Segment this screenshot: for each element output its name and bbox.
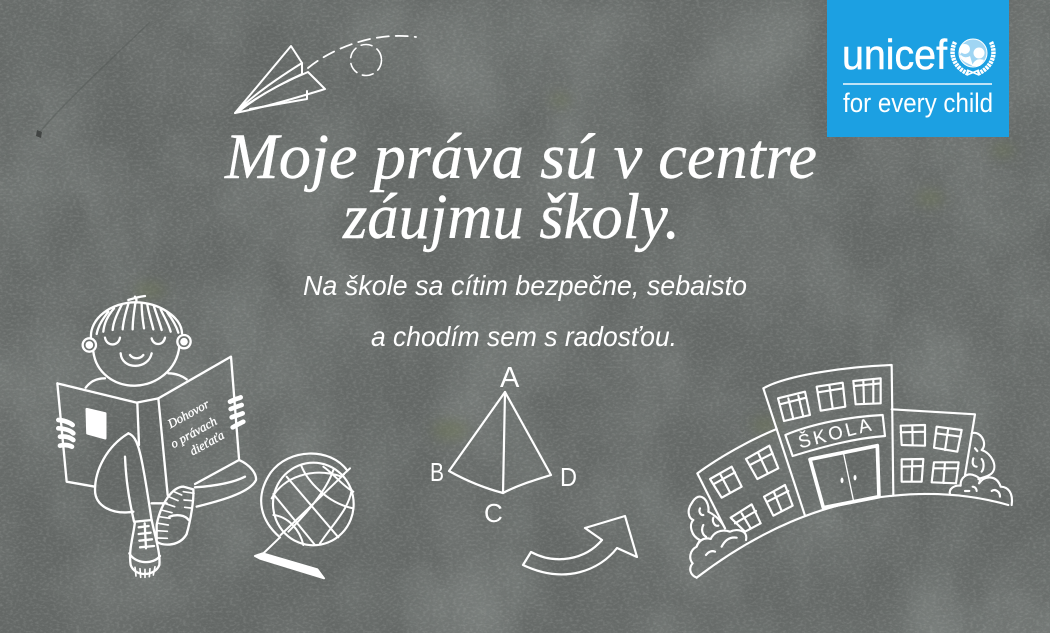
book title second line: o právach xyxy=(168,414,219,451)
illustration: boy reading a book xyxy=(57,296,256,577)
icon: globe xyxy=(255,454,354,578)
illustration: pyramid ABCD xyxy=(430,362,577,528)
label D: D xyxy=(560,462,577,492)
left wing xyxy=(697,429,793,532)
icon: paper plane with dashed loop xyxy=(235,36,416,113)
right wing xyxy=(892,409,975,483)
hands xyxy=(58,397,243,447)
label B: B xyxy=(430,457,444,487)
label A: A xyxy=(500,362,520,394)
ground xyxy=(697,494,1008,578)
title: Moje práva sú v centre xyxy=(224,121,817,193)
book title text: Dohovor xyxy=(164,397,212,431)
arrow: curved xyxy=(523,516,637,574)
subtitle: Na škole sa cítim bezpečne, sebaisto xyxy=(303,270,747,301)
logo tagline: for every child xyxy=(843,88,993,118)
logo: UNICEF xyxy=(827,0,1009,137)
illustration: school building xyxy=(689,365,1012,578)
right bushes xyxy=(950,433,1012,505)
left bushes xyxy=(689,497,746,578)
open book xyxy=(57,357,239,495)
logo wordmark: unicef xyxy=(842,31,947,78)
legs and shoes xyxy=(95,433,256,577)
subtitle second line: a chodím sem s radosťou. xyxy=(371,321,677,352)
school door xyxy=(810,446,879,508)
title xyxy=(224,121,817,253)
logo emblem xyxy=(953,39,993,75)
subtitle xyxy=(303,270,747,352)
school sign: ŠKOLA xyxy=(796,413,876,452)
book title third line: dieťaťa xyxy=(187,428,227,458)
head and face xyxy=(83,296,191,388)
label C: C xyxy=(484,498,503,528)
title second line: záujmu školy. xyxy=(342,181,680,253)
central block xyxy=(763,365,893,516)
